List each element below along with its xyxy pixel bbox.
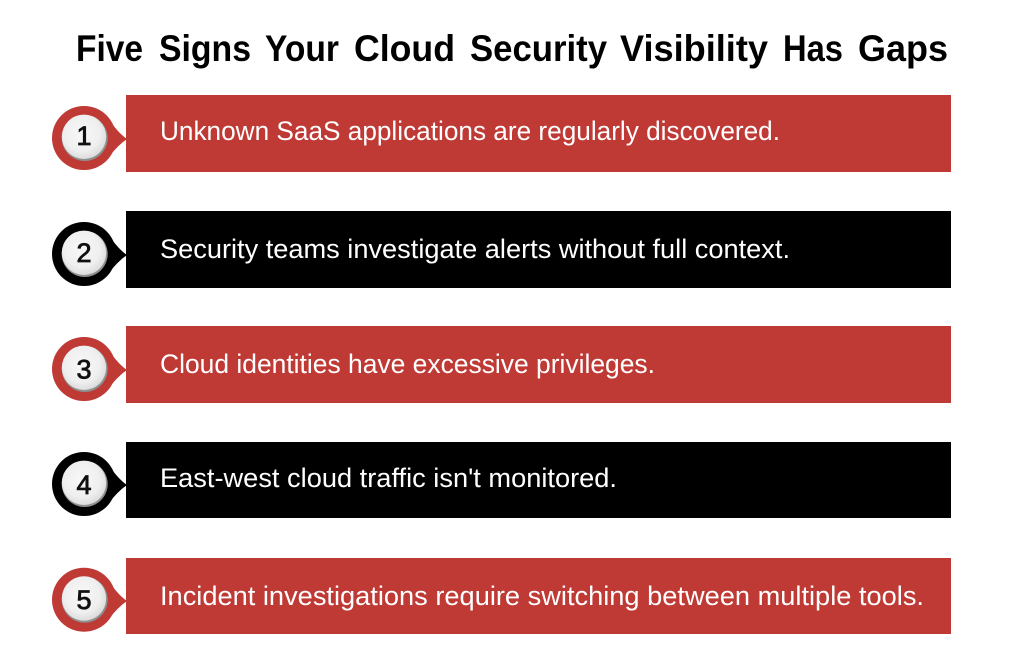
title: Gaps — [858, 28, 948, 69]
title: Five — [76, 28, 143, 69]
title: Visibility — [620, 28, 768, 69]
row 4: east-west traffic — [52, 442, 951, 518]
title: Cloud — [354, 28, 455, 69]
number badge 2: 2 — [76, 238, 92, 268]
title: Has — [783, 28, 843, 69]
text 1: Unknown SaaS applications are regularly discovered. — [160, 116, 780, 146]
row 2: alerts without context — [52, 211, 951, 288]
bar 1 — [126, 95, 951, 172]
text 4: East-west cloud traffic isn't monitored. — [160, 463, 617, 493]
text 2: Security teams investigate alerts without full context. — [160, 234, 790, 264]
number badge 5 — [52, 568, 127, 632]
row 5: switching tools — [52, 558, 951, 634]
number badge 5: 5 — [76, 585, 92, 615]
number badge 3: 3 — [76, 354, 92, 384]
number badge 4 — [52, 452, 127, 516]
text 3: Cloud identities have excessive privileges. — [160, 349, 655, 379]
row 3: excessive privileges — [52, 326, 951, 403]
text 5: Incident investigations require switching between multiple tools. — [160, 581, 924, 611]
number badge 2 — [52, 222, 127, 286]
bar 5 — [126, 558, 951, 634]
title: Your — [265, 28, 339, 69]
bar 4 — [126, 442, 951, 518]
number badge 1: 1 — [76, 121, 92, 151]
number badge 4: 4 — [76, 470, 92, 500]
row 1: unknown SaaS applications — [52, 95, 951, 172]
number badge 3 — [52, 337, 127, 401]
number badge 1 — [52, 106, 127, 170]
title: Signs — [159, 28, 251, 69]
bar 2 — [126, 211, 951, 288]
bar 3 — [126, 326, 951, 403]
title: Security — [470, 28, 607, 69]
